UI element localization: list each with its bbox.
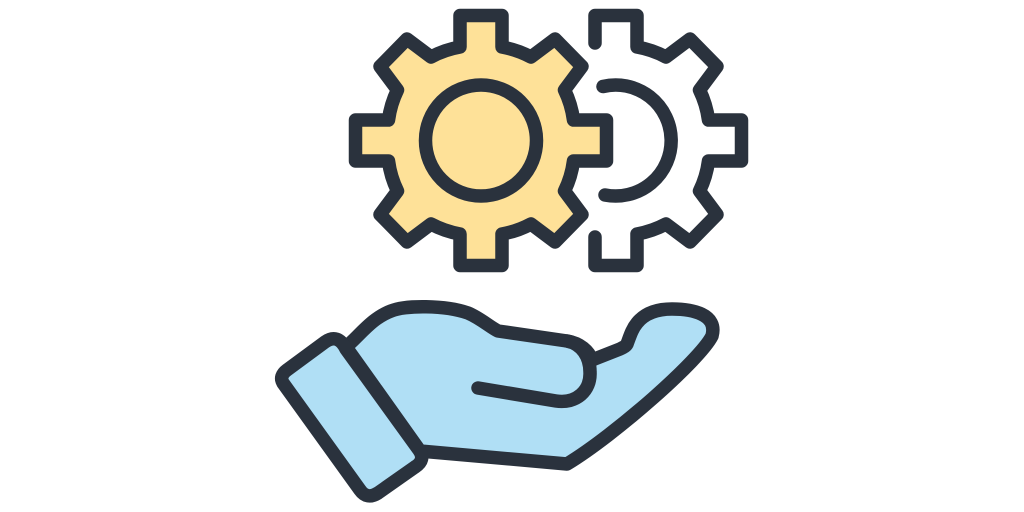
icon: white gear — [595, 16, 742, 266]
white gear inner arc — [603, 85, 671, 196]
icon: sleeve cuff — [282, 339, 422, 496]
yellow gear hub — [426, 85, 536, 196]
hand finger line — [478, 341, 590, 401]
icon: yellow gear — [356, 16, 606, 266]
icon: open hand — [346, 307, 713, 464]
